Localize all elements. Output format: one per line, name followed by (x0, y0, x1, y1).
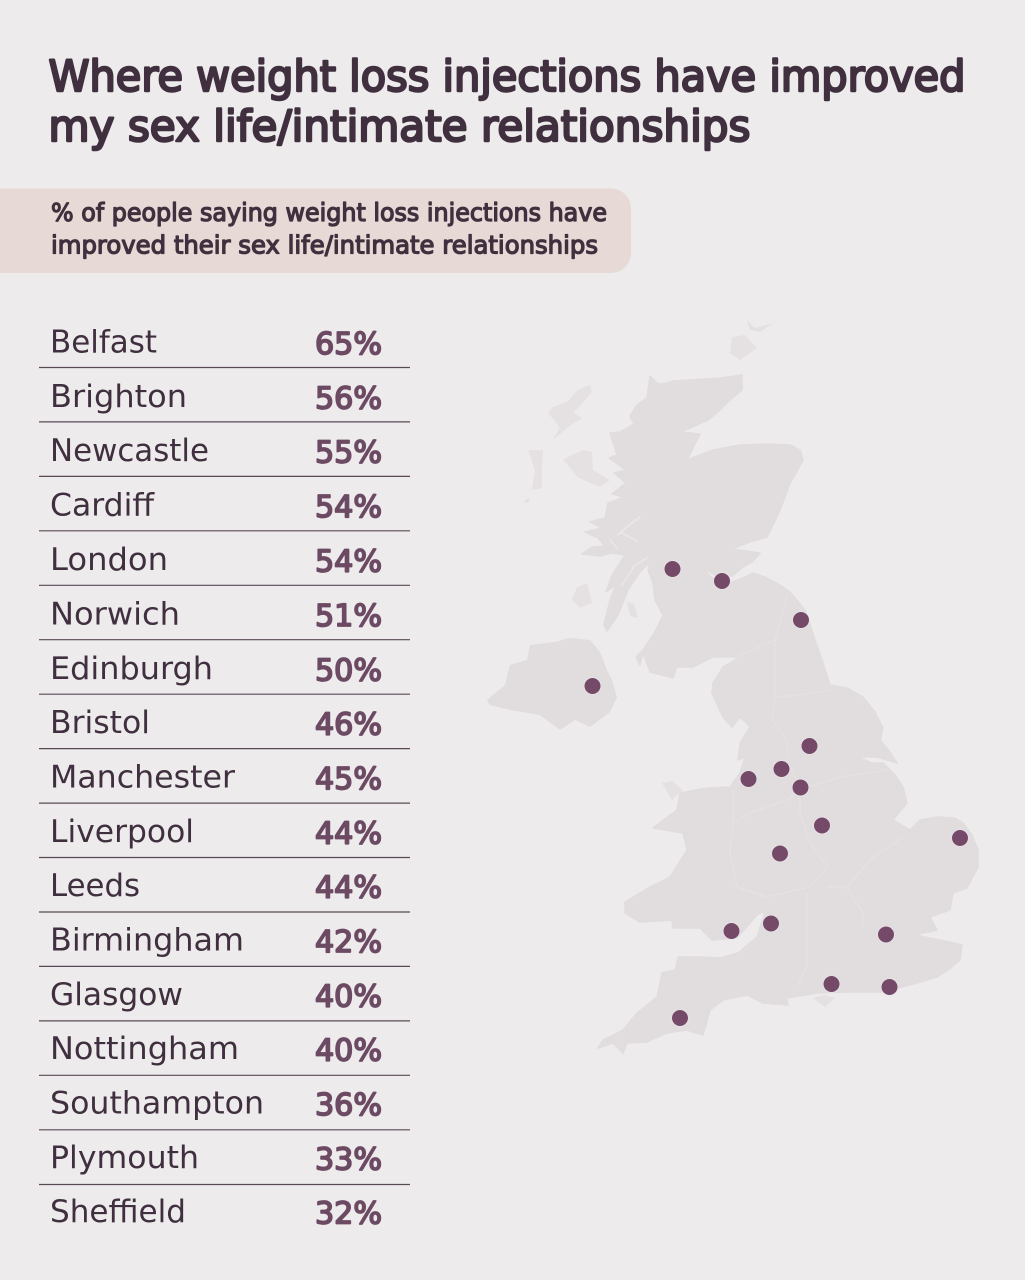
row: Bristol: 46% (315, 708, 382, 742)
row: Belfast: Belfast (50, 324, 157, 360)
title (48, 53, 966, 152)
pin: Brighton (881, 979, 898, 995)
row: Southampton: Southampton (50, 1086, 264, 1122)
row: Cardiff (39, 488, 410, 531)
pin: Newcastle (793, 612, 809, 628)
row: Bristol (39, 705, 410, 749)
row: Plymouth (39, 1140, 410, 1184)
row: Nottingham: Nottingham (50, 1031, 239, 1067)
row: Liverpool: 44% (315, 816, 382, 852)
pin: Southampton (823, 976, 840, 992)
row: Norwich: Norwich (50, 596, 180, 632)
row: Belfast: 65% (315, 327, 382, 362)
pin: Edinburgh (714, 573, 730, 589)
pin: Norwich (952, 830, 968, 846)
map pins: cities (584, 561, 968, 1026)
row: Cardiff: 54% (315, 490, 382, 525)
pin: Nottingham (814, 817, 830, 834)
row: Southampton (39, 1086, 410, 1130)
row: Sheffield: Sheffield (50, 1194, 186, 1230)
row: London: 54% (315, 544, 382, 580)
row: Manchester (39, 760, 410, 803)
row: Sheffield (50, 1194, 382, 1232)
row: Southampton: 36% (315, 1088, 382, 1123)
row: Leeds: Leeds (50, 868, 140, 904)
pin: Bristol (763, 915, 779, 932)
row: Liverpool: Liverpool (50, 814, 194, 850)
row: London: London (50, 542, 168, 578)
map: Northern Ireland (487, 638, 617, 730)
row: Plymouth: 33% (315, 1142, 382, 1178)
row: London (39, 542, 410, 585)
pin: Plymouth (672, 1010, 688, 1026)
row: Manchester: Manchester (50, 760, 235, 796)
ranked city table (39, 324, 410, 1232)
pin: Birmingham (772, 845, 788, 862)
pin: Belfast (584, 678, 601, 694)
row: Birmingham: Birmingham (50, 922, 244, 958)
row: Brighton: 56% (315, 382, 382, 416)
pin: Leeds (801, 738, 818, 754)
pin: Cardiff (723, 923, 740, 939)
map: Scottish and other islands (523, 320, 835, 1007)
UK map (487, 320, 978, 1053)
title: Where weight loss injections have improved (48, 53, 966, 102)
row: Glasgow (39, 977, 410, 1021)
subtitle band: improved their sex life/intimate relationships (51, 230, 598, 260)
row: Liverpool (39, 814, 410, 858)
row: Edinburgh (39, 651, 410, 694)
row: Leeds (39, 868, 410, 912)
row: Brighton (39, 379, 410, 422)
row: Plymouth: Plymouth (50, 1140, 199, 1176)
row: Newcastle: Newcastle (50, 433, 209, 469)
map: sea lochs (603, 517, 647, 585)
subtitle band: % of people saying weight loss injections have (51, 198, 607, 227)
pin: London (878, 926, 894, 943)
row: Cardiff: Cardiff (50, 488, 155, 524)
row: Manchester: 45% (315, 762, 382, 797)
map: region borders (730, 597, 903, 987)
row: Belfast (39, 324, 410, 368)
row: Leeds: 44% (315, 870, 382, 906)
row: Glasgow: Glasgow (50, 977, 183, 1013)
row: Norwich: 51% (315, 599, 382, 634)
pin: Manchester (773, 761, 790, 777)
pin: Glasgow (664, 561, 681, 577)
row: Nottingham (39, 1031, 410, 1075)
map: Great Britain mainland (582, 375, 978, 1053)
row: Edinburgh: Edinburgh (50, 651, 213, 687)
pin: Liverpool (740, 771, 757, 787)
row: Glasgow: 40% (315, 980, 382, 1014)
row: Newcastle: 55% (315, 436, 382, 470)
row: Nottingham: 40% (315, 1034, 382, 1068)
row: Birmingham (39, 922, 410, 966)
row: Brighton: Brighton (50, 379, 187, 415)
pin: Sheffield (792, 779, 809, 796)
subtitle band (0, 188, 631, 273)
row: Sheffield: 32% (315, 1196, 382, 1232)
row: Bristol: Bristol (50, 705, 150, 741)
row: Birmingham: 42% (315, 925, 382, 960)
row: Norwich (39, 596, 410, 640)
row: Edinburgh: 50% (315, 654, 382, 688)
row: Newcastle (39, 433, 410, 476)
title: my sex life/intimate relationships (48, 103, 750, 152)
